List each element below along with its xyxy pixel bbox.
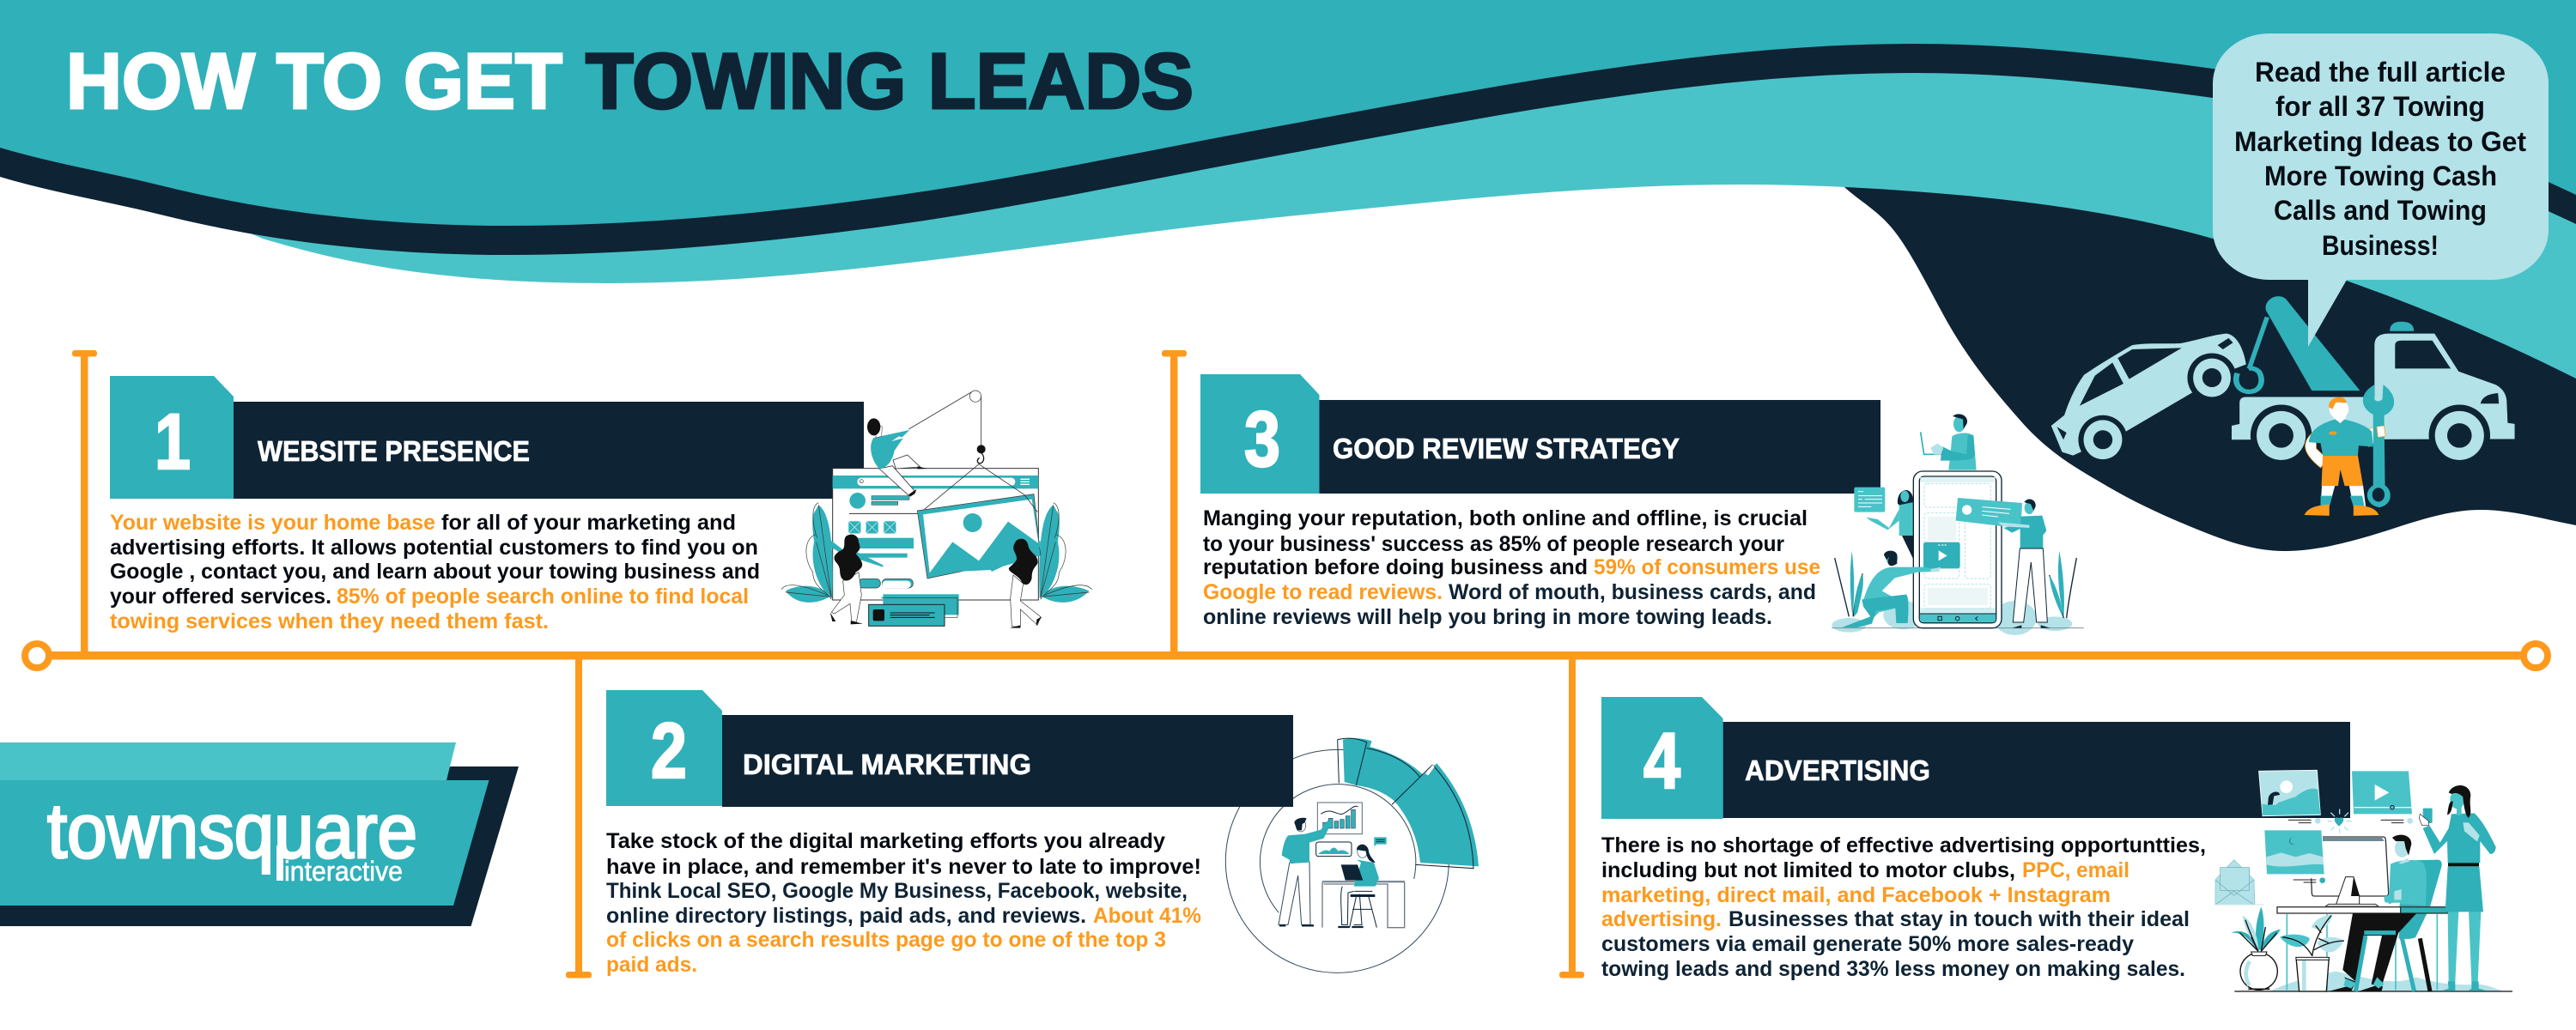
body text: online reviews will help you bring in more towing leads. (1203, 605, 1772, 629)
body text: customers via email generate 50% more sales-ready (1601, 932, 2134, 956)
body text: marketing, direct mail, and Facebook + Instagram (1601, 883, 2111, 907)
heading bar: 4 (1643, 718, 1680, 805)
body text: Word of mouth, business cards, and (1449, 580, 1816, 604)
panel: 2 digital marketing (606, 690, 1479, 977)
icon: towed car (2051, 334, 2246, 464)
body text: including but not limited to motor clubs, (1601, 858, 2015, 882)
heading bar: 3 (1244, 396, 1280, 483)
body text: paid ads. (606, 953, 697, 977)
body text: Your website is your home base (110, 511, 435, 535)
header wave background (0, 0, 2576, 551)
heading bar: GOOD REVIEW STRATEGY (1333, 433, 1680, 464)
body text: PPC, email (2022, 858, 2129, 882)
callout: speech bubble: More Towing Cash (2264, 161, 2497, 191)
icon: mechanic with wrench (2305, 385, 2394, 516)
panel: 1 website presence (110, 376, 1092, 633)
callout: speech bubble: for all 37 Towing (2275, 91, 2485, 122)
title (66, 38, 1194, 125)
heading bar: ADVERTISING (1745, 754, 1930, 786)
heading bar (606, 690, 1293, 807)
panel: 4 advertising (1601, 697, 2512, 991)
body text: advertising efforts. It allows potential customers to find you on (110, 536, 758, 560)
heading bar: 2 (651, 707, 687, 795)
body text: 59% of consumers use (1594, 555, 1820, 579)
icon: tow truck (2232, 296, 2515, 466)
body text: online directory listings, paid ads, and reviews. (606, 904, 1086, 928)
callout: speech bubble: Calls and Towing (2274, 195, 2487, 226)
body text: reputation before doing business and (1203, 555, 1588, 579)
logo: townsquare interactive (0, 742, 519, 926)
panel: 3 good review strategy (1200, 374, 2084, 635)
body text: 85% of people search online to find local (337, 585, 749, 609)
body text (1601, 833, 2206, 981)
heading bar: 1 (155, 398, 191, 486)
body text: About 41% (1093, 904, 1201, 928)
logo: townsquare interactive: townsquare (47, 789, 417, 875)
illustration: website under construction (781, 391, 1092, 628)
body text: your offered services. (110, 585, 331, 609)
body text (1203, 506, 1820, 629)
timeline (25, 350, 2548, 978)
heading bar (110, 376, 864, 499)
body text: Google to read reviews. (1203, 580, 1443, 604)
body text: to your business' success as 85% of people research your (1203, 532, 1784, 556)
heading bar: DIGITAL MARKETING (743, 748, 1031, 780)
title: TOWING LEADS (586, 38, 1194, 125)
illustration: marketing team at desk (2215, 770, 2512, 991)
illustration: analytics ring with team (1225, 738, 1479, 972)
body text: advertising. (1601, 907, 1722, 931)
body text: have in place, and remember it's never to late to improve! (606, 855, 1201, 879)
body text: Manging your reputation, both online and offline, is crucial (1203, 506, 1807, 530)
body text: for all of your marketing and (441, 511, 736, 535)
body text: Google , contact you, and learn about your towing business and (110, 560, 760, 584)
body text (110, 511, 760, 633)
callout: speech bubble: Marketing Ideas to Get (2234, 126, 2526, 157)
heading bar: WEBSITE PRESENCE (258, 435, 530, 467)
heading bar (1200, 374, 1880, 494)
callout: speech bubble: Read the full article (2255, 57, 2506, 88)
callout: speech bubble: Business! (2322, 230, 2439, 261)
illustration: phone with people (1832, 414, 2084, 635)
body text: towing services when they need them fast. (110, 609, 549, 633)
body text: There is no shortage of effective advertising opportuntties, (1601, 833, 2206, 857)
body text: Businesses that stay in touch with their ideal (1728, 907, 2190, 931)
callout: speech bubble (2213, 33, 2549, 347)
body text: of clicks on a search results page go to one of the top 3 (606, 928, 1166, 952)
body text (606, 829, 1201, 977)
logo: townsquare interactive: interactive (284, 856, 403, 887)
heading bar (1601, 697, 2350, 819)
body text: Take stock of the digital marketing efforts you already (606, 829, 1165, 853)
title: HOW TO GET (66, 38, 562, 125)
body text: towing leads and spend 33% less money on making sales. (1601, 957, 2185, 981)
tow truck illustration (2051, 296, 2515, 516)
body text: Think Local SEO, Google My Business, Facebook, website, (606, 879, 1188, 903)
